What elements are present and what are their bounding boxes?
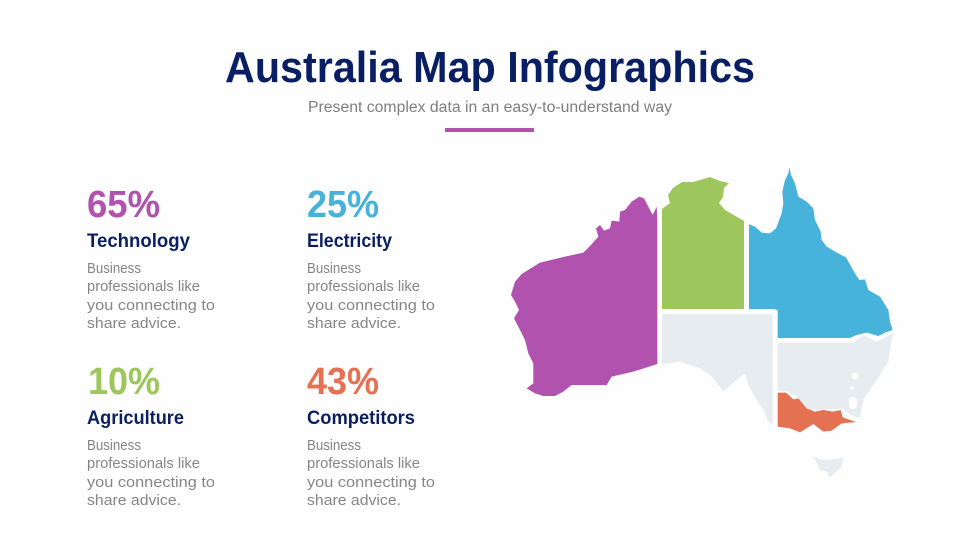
stat block: Electricity 25%: you connecting to (307, 297, 435, 314)
stat block: Competitors 43% (307, 361, 435, 509)
islands cut-out (848, 373, 858, 409)
stat block: Agriculture 10%: Agriculture (87, 408, 184, 429)
stat block: Competitors 43%: professionals like (307, 455, 420, 472)
subtitle: Present complex data in an easy-to-understand way (308, 99, 672, 116)
stat block: Electricity 25%: Business (307, 260, 361, 277)
stat block: Technology 65%: professionals like (87, 278, 200, 295)
region: South Australia (662, 314, 773, 425)
stat block: Competitors 43%: share advice. (307, 492, 401, 509)
stat block: Agriculture 10%: Business (87, 437, 141, 454)
stat block: Technology 65%: 65% (87, 184, 160, 226)
stat block: Agriculture 10%: you connecting to (87, 474, 215, 491)
stat block: Competitors 43%: you connecting to (307, 474, 435, 491)
title underline accent (445, 128, 534, 132)
stat block: Electricity 25%: professionals like (307, 278, 420, 295)
title: Australia Map Infographics (225, 43, 755, 92)
stat block: Technology 65%: Technology (87, 231, 190, 252)
stat block: Technology 65%: share advice. (87, 315, 181, 332)
region: Tasmania (813, 456, 843, 477)
stat block: Technology 65%: you connecting to (87, 297, 215, 314)
region: Victoria (778, 393, 856, 432)
stat block: Agriculture 10%: professionals like (87, 455, 200, 472)
stat block: Agriculture 10%: share advice. (87, 492, 181, 509)
stat block: Electricity 25% (307, 184, 435, 332)
stat block: Electricity 25%: Electricity (307, 231, 392, 252)
stat block: Competitors 43%: Competitors (307, 408, 415, 429)
region: New South Wales (778, 333, 893, 417)
region: Queensland (749, 167, 893, 338)
stat block: Technology 65%: Business (87, 260, 141, 277)
stat block: Competitors 43%: 43% (307, 361, 379, 403)
region: Northern Territory (662, 177, 744, 309)
stat block: Competitors 43%: Business (307, 437, 361, 454)
stat block: Agriculture 10% (87, 361, 215, 509)
region: Western Australia (511, 197, 657, 396)
map of Australia (511, 167, 893, 477)
stat block: Electricity 25%: 25% (307, 184, 379, 226)
stat block: Agriculture 10%: 10% (88, 361, 160, 403)
stat block: Electricity 25%: share advice. (307, 315, 401, 332)
stat block: Technology 65% (87, 184, 215, 332)
